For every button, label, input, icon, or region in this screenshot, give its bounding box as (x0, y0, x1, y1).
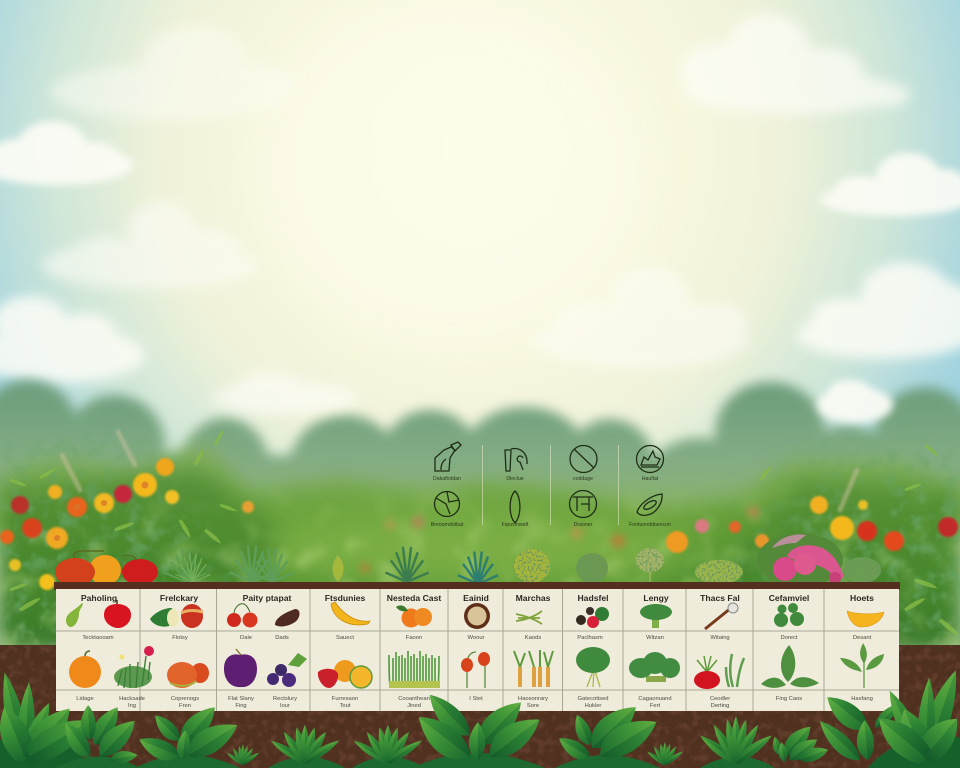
plant: spiky grass (268, 725, 345, 768)
icon: plum and grapes (224, 649, 307, 687)
background: sun glow (260, 0, 640, 340)
safety icons grid (431, 442, 671, 528)
row 2 labels: Hukler (585, 703, 601, 709)
icon: broccoli (640, 604, 672, 628)
icon: tools (505, 449, 527, 471)
icon: single large leaf plant (761, 645, 819, 688)
clouds (0, 14, 960, 383)
icon: pestle tool (705, 603, 738, 629)
column headings: Marchas (516, 593, 551, 603)
plant: right small leaves (770, 721, 830, 765)
icon captions: Fqozonwaft (502, 522, 529, 528)
icon: sphere (434, 492, 460, 516)
column headings (81, 593, 874, 603)
plants along the shelf (166, 546, 881, 584)
icon: spring onions (514, 650, 553, 687)
icon: tomato and peach (167, 662, 209, 688)
table: produce chart (56, 589, 899, 711)
icon: yellow pepper (847, 611, 884, 627)
row 2 labels: I Stet (469, 696, 483, 702)
row 1 labels (82, 635, 872, 641)
row 1 labels: Sauect (336, 635, 354, 641)
icon: pear and apple (66, 600, 131, 628)
icon captions: Dleclue (506, 476, 524, 482)
icon: green beans (516, 611, 542, 624)
background: garden foliage (0, 420, 960, 650)
row 1 labels: Witaing (710, 635, 730, 641)
row 2 labels: Rectslury (273, 696, 297, 702)
row 2 labels: Cagaonuand (638, 696, 672, 702)
icon: flowering herb (114, 646, 154, 688)
row 1 labels: Faoon (406, 635, 422, 641)
row 2 labels: Gatecotised (578, 696, 608, 702)
icon captions (431, 476, 671, 528)
row 2 labels: Furresaon (332, 696, 358, 702)
icon: red buds on stems (461, 652, 490, 688)
row 2 labels: Derting (711, 703, 729, 709)
icon: orange fruit (69, 651, 101, 688)
row 2 labels: Fert (650, 703, 661, 709)
icon: banana (331, 602, 370, 625)
column headings: Eainid (463, 593, 489, 603)
row 1 labels: Desant (853, 635, 872, 641)
pink flower bush (757, 533, 844, 587)
foliage leaves: left bed (9, 428, 238, 612)
icon: bottle (435, 442, 461, 471)
icon: leafy greens head (629, 652, 680, 682)
plant: left broad leaves (55, 702, 142, 768)
column headings: Ftsdunies (325, 593, 366, 603)
icon: pipes in circle (570, 490, 596, 518)
icon: cherries and dark fruit (227, 604, 300, 628)
plant: broadleaf cluster (135, 699, 243, 768)
icon captions: coddage (573, 476, 593, 482)
column headings: Hadsfel (577, 593, 609, 603)
icon: leafy cluster (774, 603, 804, 627)
soil (0, 645, 960, 768)
icon: oranges (396, 605, 432, 628)
icon: berries and greens (576, 607, 609, 628)
icon: wheatgrass (389, 651, 440, 688)
low clouds over the tree line (213, 372, 893, 423)
column headings: Thacs Fal (700, 593, 740, 603)
row 2 labels: Haosonrary (518, 696, 548, 702)
shelf board (54, 582, 900, 590)
row 2 labels: Hasfang (851, 696, 873, 702)
row 2 labels: Sore (527, 703, 539, 709)
icon: tomato and grasses (694, 654, 744, 689)
icon: coconut (464, 603, 490, 629)
flowers: left bed (0, 458, 424, 590)
foliage leaves: right bed (759, 444, 960, 637)
plant: centre right broad leaves (555, 697, 663, 768)
row 2 labels: Ceodler (710, 696, 730, 702)
column headings: Frelckary (160, 593, 198, 603)
plant: low tufts (646, 716, 775, 768)
row 1 labels: Woour (468, 635, 485, 641)
icon captions: Draoner (574, 522, 593, 528)
icon captions: Dakaftotdan (433, 476, 461, 482)
row 2 labels: Tout (340, 703, 351, 709)
row 1 labels: Kaods (525, 635, 541, 641)
flower stalks: pale spikes (62, 432, 857, 510)
row 2 labels: lour (280, 703, 290, 709)
row 2 labels: Lidage (76, 696, 94, 702)
row 2 labels: Fing (235, 703, 247, 709)
row 1 labels: Paclhasm (577, 635, 603, 641)
background: sky (0, 0, 960, 480)
row 1 labels: Witzan (646, 635, 664, 641)
flowers: right bed (571, 496, 958, 553)
icon captions: Fontunnddoencon (629, 522, 671, 528)
icon: papaya (637, 494, 662, 515)
foreground plants (0, 666, 960, 768)
icon: strawberry and citrus (318, 660, 372, 688)
column headings: Paity ptapat (243, 593, 291, 603)
column headings: Cefamviel (769, 593, 809, 603)
table grid (56, 589, 899, 711)
icon: spinach bunch (576, 647, 610, 687)
icon captions: Breoomdotbat (431, 522, 464, 528)
row 2 labels: Coprenogs (171, 696, 199, 702)
background: distant trees (0, 380, 960, 535)
row 1 labels: Tecktaooam (82, 635, 114, 641)
plant: far right large leaves (813, 666, 960, 768)
row 2 labels: Ing (128, 703, 136, 709)
row 1 labels: Dorect (780, 635, 798, 641)
row 2 labels: Fing Caos (776, 696, 802, 702)
plant: central broad leaves (409, 688, 547, 768)
row 2 labels: Cooanthean (398, 696, 430, 702)
plant: small dark tuft (226, 744, 260, 766)
row 2 labels: Fren (179, 703, 191, 709)
row 2 labels (76, 696, 873, 709)
plant: far left fern (0, 670, 97, 768)
column headings: Paholing (81, 593, 117, 603)
icon: prohibited circle (570, 446, 597, 472)
icon captions: Hauflat (642, 476, 659, 482)
column headings: Nesteda Cast (387, 593, 441, 603)
row 1 labels: Dads (275, 635, 289, 641)
row 1 labels: Dale (240, 635, 252, 641)
icon: seed (510, 491, 520, 523)
row 1 labels: Flotsy (172, 635, 188, 641)
plant: low spiky grass (351, 725, 425, 768)
icon: zucchini and sliced tomato (150, 604, 203, 628)
row 2 labels: Jined (407, 703, 421, 709)
table background (56, 589, 899, 711)
column headings: Lengy (643, 593, 669, 603)
row 2 labels: Hacksade (119, 696, 145, 702)
icon: round food (636, 446, 664, 472)
row 2 labels: Flat Slany (228, 696, 254, 702)
produce on shelf: tomatoes and squash (55, 551, 158, 586)
column headings: Hoets (850, 593, 874, 603)
icon: sprig of leaves (840, 643, 884, 688)
